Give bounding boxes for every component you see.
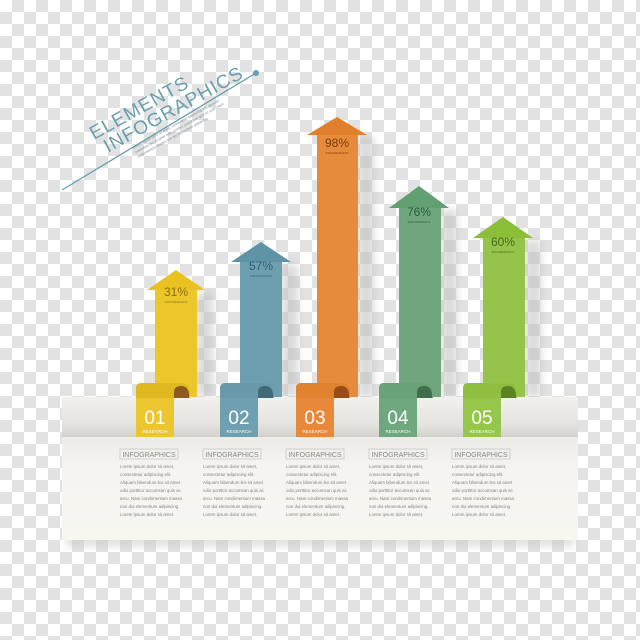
tab 02: 02	[228, 408, 250, 429]
tab 05: RESEARCH	[469, 429, 495, 434]
column texts	[120, 449, 515, 517]
column 4 text	[369, 449, 432, 517]
tab 02: RESEARCH	[226, 429, 252, 434]
arrow shadows	[197, 137, 541, 397]
tab 01: RESEARCH	[142, 429, 168, 434]
base panel	[62, 397, 578, 546]
arrow 5 lime: 60%	[491, 235, 515, 249]
arrow 5 lime: INFOGRAPHICS	[492, 250, 514, 254]
tab 04	[379, 383, 433, 437]
column 2 text: odio porttitor accumsan quis ac	[203, 488, 265, 493]
column 1 text: INFOGRAPHICS	[122, 452, 176, 459]
column 2 text: INFOGRAPHICS	[205, 452, 259, 459]
column 2 text: Lorem ipsum dolor sit amet,	[203, 464, 257, 469]
column 1 text: Lorem ipsum dolor sit amet.	[120, 512, 174, 517]
arrow 3 orange: 98%	[325, 136, 349, 150]
column 3 text: non dui elementum adipiscing.	[286, 504, 345, 509]
column 3 text: Lorem ipsum dolor sit amet,	[286, 464, 340, 469]
arrow 4 green: 76%	[407, 205, 431, 219]
arrow 2 blue: INFOGRAPHICS	[250, 274, 272, 278]
arrow 4 green: INFOGRAPHICS	[408, 220, 430, 224]
tab 05	[463, 383, 517, 437]
column 4 text: Lorem ipsum dolor sit amet,	[369, 464, 423, 469]
arrow 1 yellow	[147, 270, 205, 399]
column 5 text: Lorem ipsum dolor sit amet.	[452, 512, 506, 517]
tab 03	[296, 383, 350, 437]
column 2 text: Lorem ipsum dolor sit amet.	[203, 512, 257, 517]
tab 04: RESEARCH	[385, 429, 411, 434]
title: condimentum massa non dui elementum adipiscing.	[137, 116, 209, 159]
column 1 text	[120, 449, 183, 517]
arrow 3 orange	[307, 117, 367, 399]
column 2 text: non dui elementum adipiscing.	[203, 504, 262, 509]
tab 01: 01	[144, 408, 166, 429]
column 5 text: Aliquam bibendum leo sit amet	[452, 480, 513, 485]
column 5 text	[452, 449, 515, 517]
arrow 1 yellow: INFOGRAPHICS	[165, 300, 187, 304]
column 4 text: consectetur adipiscing elit.	[369, 472, 420, 477]
column 5 text: arcu. Nam condimentum massa	[452, 496, 515, 501]
column 3 text: odio porttitor accumsan quis ac	[286, 488, 348, 493]
column 3 text: INFOGRAPHICS	[288, 452, 342, 459]
title	[62, 47, 259, 190]
column 3 text: Aliquam bibendum leo sit amet	[286, 480, 347, 485]
column 5 text: consectetur adipiscing elit.	[452, 472, 504, 477]
title: Lorem ipsum dolor sit amet, consectetur adipiscing elit, aliquam	[132, 99, 220, 150]
column 1 text: non dui elementum adipiscing.	[120, 504, 179, 509]
column 5 text: non dui elementum adipiscing.	[452, 504, 511, 509]
arrow 5 lime	[473, 217, 533, 399]
column 5 text: INFOGRAPHICS	[454, 452, 508, 459]
arrow 2 blue	[231, 242, 291, 399]
column 2 text: arcu. Nam condimentum massa	[203, 496, 266, 501]
column 1 text: Aliquam bibendum leo sit amet	[120, 480, 181, 485]
column 2 text: consectetur adipiscing elit.	[203, 472, 254, 477]
column 1 text: odio porttitor accumsan quis ac	[120, 488, 182, 493]
title: ELEMENTS	[86, 72, 193, 144]
column 4 text: Aliquam bibendum leo sit amet	[369, 480, 430, 485]
column 4 text: INFOGRAPHICS	[371, 452, 425, 459]
tab 03: RESEARCH	[302, 429, 328, 434]
title line	[62, 73, 256, 190]
column 4 text: Lorem ipsum dolor sit amet.	[369, 512, 423, 517]
column 3 text: consectetur adipiscing elit.	[286, 472, 338, 477]
arrow 1 yellow: 31%	[164, 285, 188, 299]
tab 04: 04	[387, 408, 409, 429]
tab 01	[136, 383, 190, 437]
title: bibendum leo sit amet odio porttitor accumsan quis ac arcu. Nam	[134, 102, 224, 154]
tab 02	[220, 383, 274, 437]
column 4 text: odio porttitor accumsan quis ac	[369, 488, 431, 493]
column 1 text: Lorem ipsum dolor sit amet,	[120, 464, 174, 469]
arrow 4 green	[389, 186, 449, 399]
column 4 text: non dui elementum adipiscing.	[369, 504, 428, 509]
arrow 2 blue: 57%	[249, 259, 273, 273]
column 5 text: Lorem ipsum dolor sit amet,	[452, 464, 506, 469]
column 1 text: arcu. Nam condimentum massa	[120, 496, 183, 501]
tab 03: 03	[304, 408, 326, 429]
column 4 text: arcu. Nam condimentum massa	[369, 496, 432, 501]
column 2 text	[203, 449, 266, 517]
column 1 text: consectetur adipiscing elit.	[120, 472, 172, 477]
title: INFOGRAPHICS	[100, 63, 247, 157]
arrow 3 orange: INFOGRAPHICS	[326, 151, 348, 155]
column 2 text: Aliquam bibendum leo sit amet	[203, 480, 264, 485]
column 3 text: Lorem ipsum dolor sit amet.	[286, 512, 340, 517]
column 5 text: odio porttitor accumsan quis ac	[452, 488, 514, 493]
tab 05: 05	[471, 408, 493, 429]
column 3 text	[286, 449, 349, 517]
column 3 text: arcu. Nam condimentum massa	[286, 496, 349, 501]
